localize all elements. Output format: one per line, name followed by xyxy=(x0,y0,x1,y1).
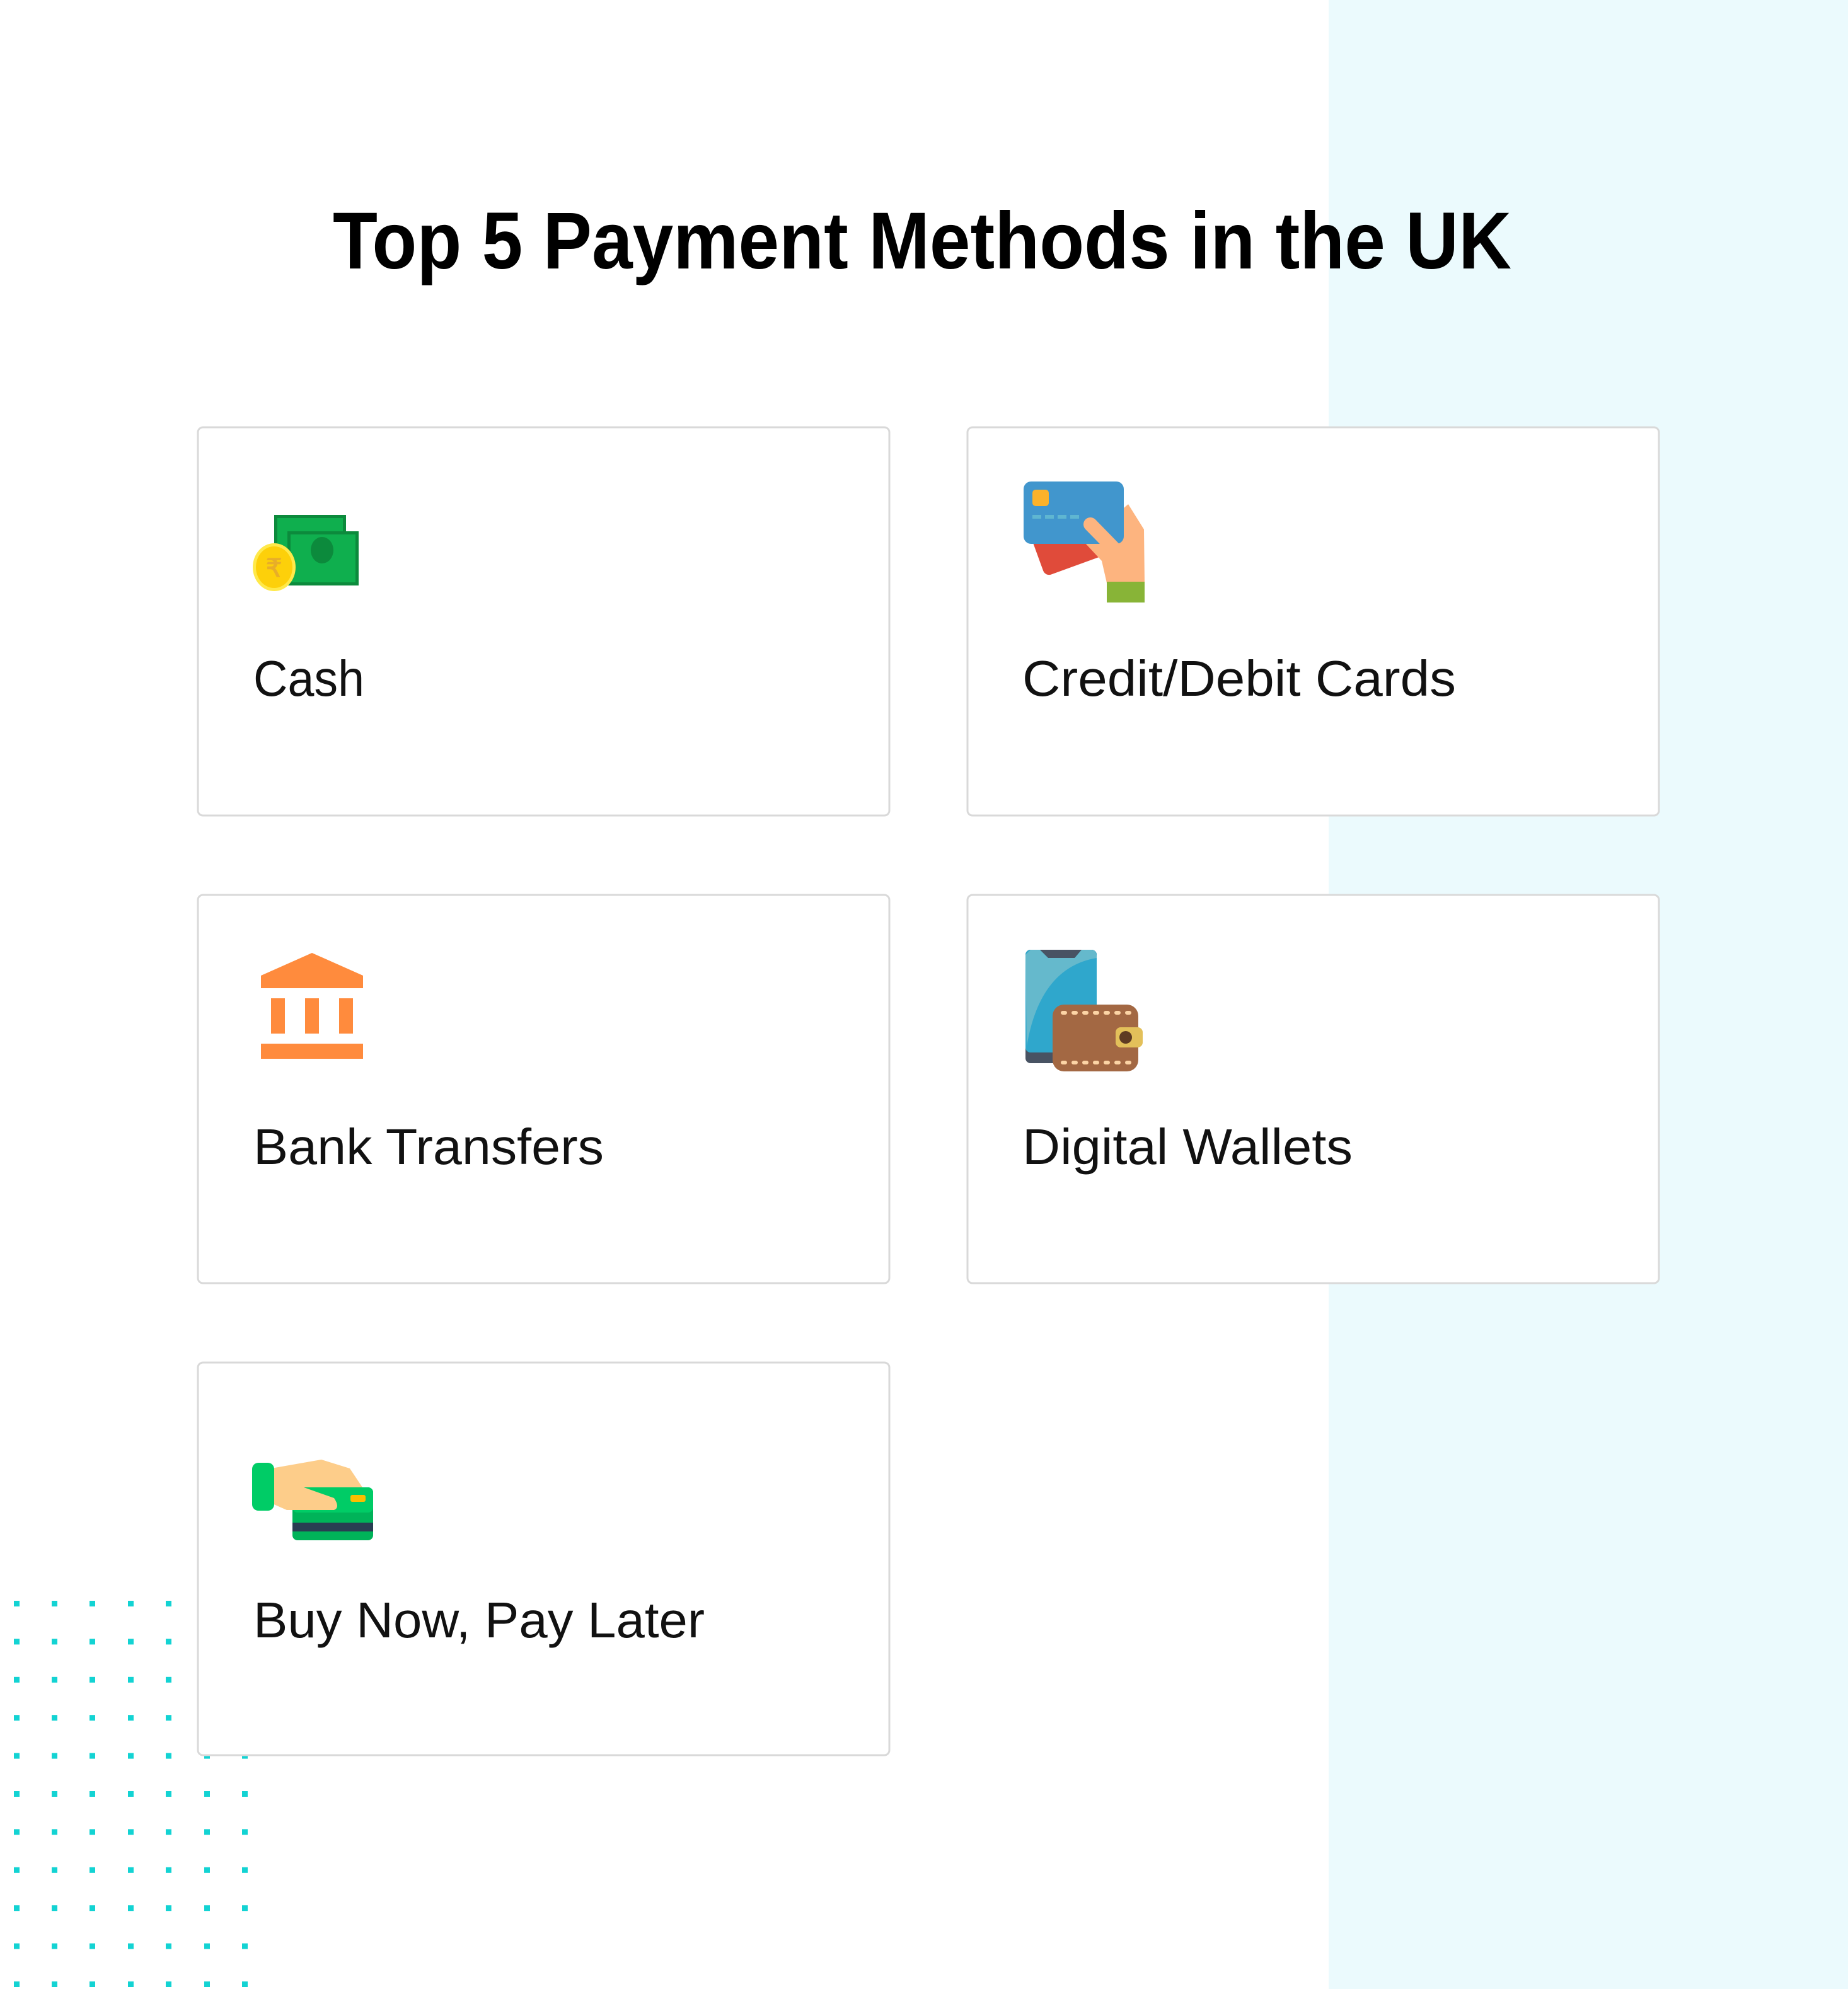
icon: bank xyxy=(261,953,363,1059)
label: buy now pay later: Buy Now, Pay Later xyxy=(253,1592,705,1648)
panel: bank transfers xyxy=(198,895,889,1283)
icon: cash: ₹ xyxy=(266,555,282,582)
dot pattern xyxy=(14,1601,248,1987)
icon: cash xyxy=(253,515,359,591)
panel: credit/debit cards xyxy=(967,427,1659,816)
panel: cash xyxy=(198,427,889,816)
label: credit/debit cards: Credit/Debit Cards xyxy=(1022,650,1456,706)
title: Top 5 Payment Methods in the UK xyxy=(333,196,1511,286)
icon: cards in hand xyxy=(1024,481,1145,602)
label: cash: Cash xyxy=(253,650,364,706)
panel: digital wallets xyxy=(967,895,1659,1283)
panel: buy now pay later xyxy=(198,1363,889,1755)
label: bank transfers: Bank Transfers xyxy=(253,1119,604,1175)
label: digital wallets: Digital Wallets xyxy=(1022,1119,1353,1175)
icon: phone and wallet xyxy=(1025,950,1143,1071)
icon: hand with card xyxy=(252,1460,373,1540)
